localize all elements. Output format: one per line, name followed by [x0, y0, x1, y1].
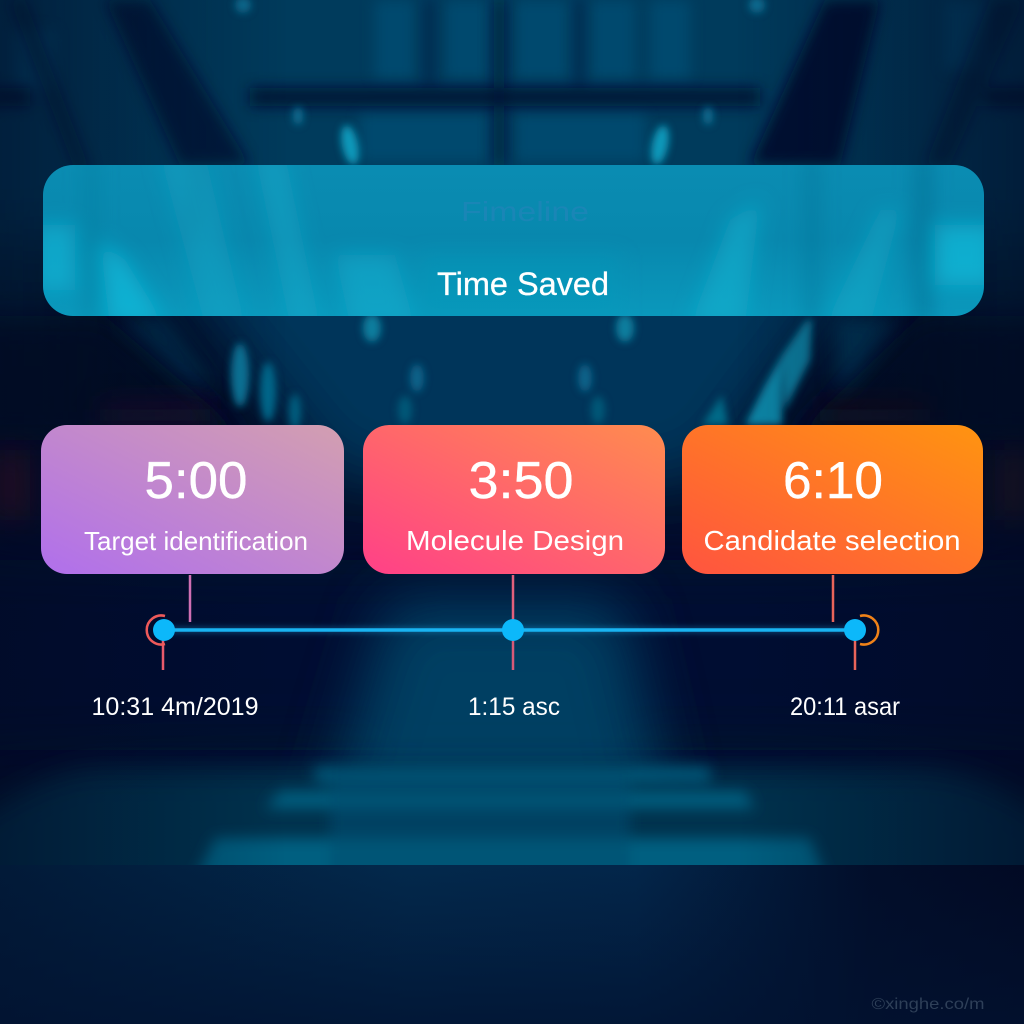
marker: middle: [502, 619, 524, 641]
ceiling and upper walls: [0, 0, 1024, 480]
value: 3:50: 3:50: [468, 452, 574, 510]
card: Candidate selection: [682, 425, 983, 574]
watermark: ©xinghe.co/m: [872, 996, 984, 1013]
dim red side glows: [0, 405, 1024, 520]
dark diagonal pillars: [0, 0, 1024, 170]
value: 6:10: 6:10: [783, 452, 883, 510]
floor: [0, 600, 1024, 900]
dark band behind timeline: [0, 560, 1024, 750]
label: Molecule Design: Molecule Design: [406, 525, 624, 556]
faint heading: Fimeline: Fimeline: [461, 196, 589, 227]
heading: Time Saved: Time Saved: [437, 266, 609, 302]
connector stems: [163, 575, 855, 670]
date label: end: 20:11 asar: [790, 693, 900, 721]
mid corridor lights: [231, 314, 812, 430]
dark side walls around cards: [0, 316, 1024, 440]
panel: header banner: [43, 165, 984, 316]
lower floor band: [0, 865, 811, 1024]
date label: middle: 1:15 asc: [468, 693, 560, 721]
label: Candidate selection: Candidate selection: [704, 525, 960, 556]
timeline: [92, 575, 900, 721]
ceiling lights: [235, 0, 765, 166]
value: 5:00: 5:00: [144, 452, 248, 510]
axis line: [165, 627, 855, 633]
card: Molecule Design: [363, 425, 665, 574]
card: Target identification: [41, 425, 344, 574]
date label: start: 10:31 4m/2019: [92, 693, 258, 721]
label: Target identification: Target identification: [84, 526, 308, 556]
ceiling slats: [15, 0, 990, 162]
marker: start: [147, 616, 175, 644]
marker: end: [844, 616, 878, 644]
